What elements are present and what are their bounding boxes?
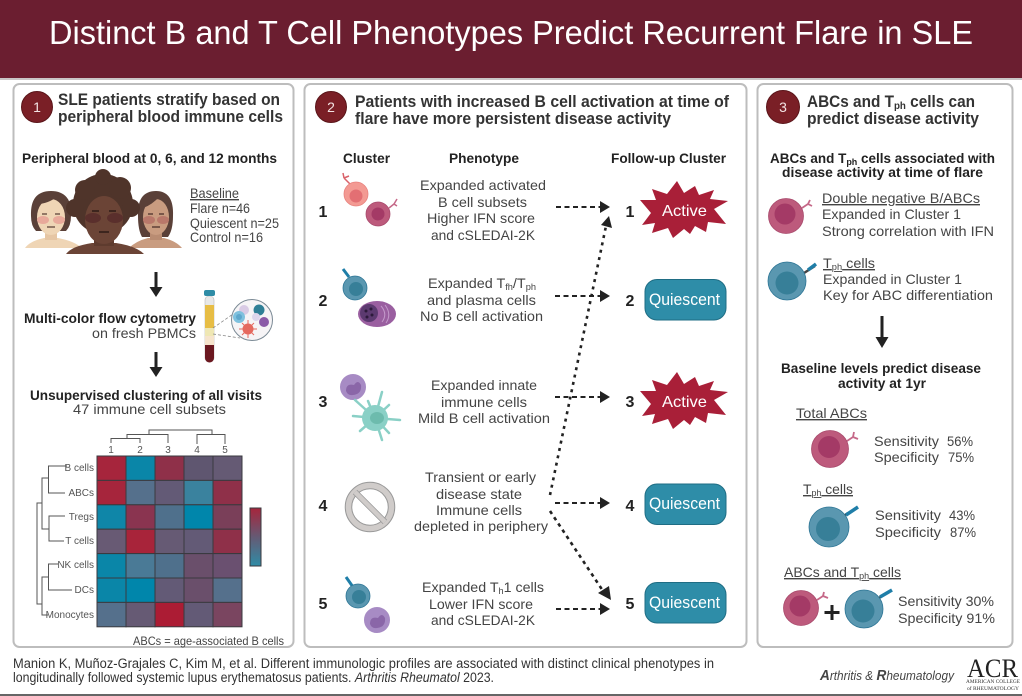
icon: ABC cell	[784, 590, 828, 626]
icon: Tph cell	[768, 262, 816, 300]
left dendrogram	[37, 466, 72, 615]
row labels: Tregs	[69, 512, 94, 523]
column labels	[108, 445, 228, 456]
panel 3 heading: predict disease activity	[807, 110, 980, 128]
heatmap colour scale	[250, 508, 261, 566]
ABC abbreviation footnote: ABCs = age-associated B cells	[133, 634, 284, 648]
row labels: ABCs	[68, 488, 94, 499]
phenotype text: cluster 3: Expanded innate	[431, 377, 537, 393]
Tph cell text: Key for ABC differentiation	[823, 287, 993, 303]
icon: cluster 4 prohibited sign	[348, 486, 392, 528]
cluster numbers: 2	[319, 293, 328, 310]
flow cytometry text: Multi-color flow cytometry	[24, 311, 196, 326]
panel 3 heading: cells can	[906, 93, 975, 111]
citation: longitudinally followed systemic lupus erythematosus patients. Arthritis Rheumatol 2023.	[13, 670, 494, 685]
column headers: Follow-up Cluster	[611, 151, 727, 166]
Tph metrics	[875, 507, 976, 540]
panel 1 heading: peripheral blood immune cells	[58, 108, 283, 126]
column labels: 1	[108, 445, 114, 456]
Tph metrics: Sensitivity	[875, 507, 941, 523]
follow-up numbers: 5	[626, 596, 635, 613]
total ABCs metrics: Specificity	[874, 449, 939, 465]
panel 3 heading: ABCs and T	[807, 93, 901, 111]
cluster numbers: 3	[319, 394, 328, 411]
cluster numbers: 1	[319, 204, 328, 221]
total ABCs label: Total ABCs	[796, 405, 867, 421]
row labels: T cells	[65, 536, 94, 547]
combined metrics: Specificity 91%	[898, 610, 995, 626]
phenotype text: cluster 2: fh	[505, 282, 513, 292]
phenotype text: cluster 3: Mild B cell activation	[418, 410, 550, 426]
top dendrogram	[111, 430, 225, 444]
flow cytometry text: on fresh PBMCs	[92, 325, 196, 341]
Tph label: ph	[811, 488, 821, 498]
step badge 3: 3	[779, 99, 787, 115]
panel 2 heading: flare have more persistent disease activity	[355, 110, 672, 128]
status badge: follow-up 3 active	[640, 372, 728, 429]
cluster numbers: 4	[319, 498, 328, 515]
step badge 2	[316, 92, 346, 122]
dotted arrow: cluster 4 to follow-up 1	[550, 216, 612, 495]
phenotype text: cluster 2: and plasma cells	[427, 292, 536, 308]
icon: cluster 2 T cell and plasma cell	[343, 269, 396, 327]
plus sign	[824, 605, 840, 620]
citation: Manion K, Muñoz-Grajales C, Kim M, et al. Different immunologic profiles are associated with distinct clinical phenotypes in	[13, 656, 714, 671]
status badge: follow-up 1 active	[640, 181, 728, 238]
combined metrics: Sensitivity 30%	[898, 593, 994, 609]
Tph metrics: 87%	[950, 524, 976, 540]
baseline cohort counts: Quiescent n=25	[190, 215, 279, 231]
row labels	[46, 463, 94, 621]
arrow down to clustering	[150, 352, 162, 377]
combined metrics	[898, 593, 995, 626]
phenotype text: cluster 5: Expanded T	[422, 579, 497, 595]
panel 3 heading: ph	[894, 100, 906, 112]
step badge 3	[766, 90, 800, 124]
phenotype text: cluster 5: h	[499, 586, 504, 596]
phenotype text: cluster 4: disease state	[436, 486, 522, 502]
panel 1 heading	[58, 91, 283, 126]
baseline prediction subheading: activity at 1yr	[838, 376, 927, 391]
phenotype text: cluster 4: depleted in periphery	[414, 518, 548, 534]
journal name: Arthritis & Rheumatology	[819, 667, 955, 684]
status badge: follow-up 4 quiescent: Quiescent	[649, 495, 720, 513]
phenotype text: cluster 4: Immune cells	[436, 502, 522, 518]
step badge 1: 1	[33, 99, 41, 115]
phenotype text: cluster 4: Transient or early	[425, 469, 536, 485]
status badge: follow-up 2 quiescent	[645, 280, 726, 320]
phenotype text: cluster 3: immune cells	[441, 394, 527, 410]
phenotype text: cluster 3	[418, 377, 550, 426]
heatmap with dendrograms	[37, 430, 242, 627]
total ABCs metrics: 56%	[947, 433, 973, 449]
Tph label: cells	[821, 481, 853, 497]
Tph metrics: 43%	[949, 507, 975, 523]
total ABCs metrics: Sensitivity	[874, 433, 939, 449]
Tph cell text	[823, 255, 993, 303]
phenotype text: cluster 5: and cSLEDAI-2K	[431, 612, 536, 628]
phenotype text: cluster 1: and cSLEDAI-2K	[431, 227, 536, 243]
baseline cohort counts: Control n=16	[190, 229, 263, 245]
baseline prediction subheading	[781, 361, 981, 391]
column labels: 5	[222, 445, 228, 456]
association subheading: cells associated with	[857, 151, 995, 166]
icon: double negative B cell	[768, 198, 812, 234]
Tph metrics: Specificity	[875, 524, 941, 540]
Tph label: T	[803, 481, 812, 497]
association subheading: ph	[846, 157, 857, 167]
phenotype text: cluster 5: 1 cells	[504, 579, 544, 595]
row labels: Monocytes	[46, 610, 94, 621]
column headers: Cluster	[343, 151, 391, 166]
phenotype text: cluster 2: Expanded T	[428, 275, 503, 291]
step badge 2: 2	[327, 99, 335, 115]
Tph cell text: Expanded in Cluster 1	[823, 271, 962, 287]
column headers: Phenotype	[449, 151, 519, 166]
phenotype text: cluster 2: /T	[513, 275, 526, 291]
clustering text: 47 immune cell subsets	[73, 401, 226, 417]
column labels: 3	[165, 445, 171, 456]
heatmap cells	[97, 456, 242, 627]
step badge 1	[22, 92, 52, 122]
phenotype text: cluster 1: B cell subsets	[438, 194, 527, 210]
phenotype text: cluster 5: Lower IFN score	[429, 596, 533, 612]
icon: Tph cell	[809, 507, 858, 547]
follow-up numbers: 3	[626, 394, 635, 411]
dotted arrow: cluster 4 to follow-up 5	[550, 511, 611, 600]
baseline prediction subheading: Baseline levels predict disease	[781, 361, 981, 376]
association subheading	[770, 151, 995, 180]
phenotype text: cluster 2	[420, 275, 543, 324]
peripheral blood subheading: Peripheral blood at 0, 6, and 12 months	[22, 151, 277, 166]
follow-up numbers: 1	[626, 204, 635, 221]
clustering text	[30, 388, 262, 417]
header banner	[0, 0, 1022, 80]
ACR logo: ACR	[967, 654, 1019, 683]
column labels: 4	[194, 445, 200, 456]
combined predictor	[784, 564, 995, 628]
phenotype text: cluster 1	[420, 177, 546, 243]
baseline cohort counts: Flare n=46	[190, 200, 250, 216]
Tph cells predictor	[803, 481, 976, 547]
panel 3: predictors of disease activity	[758, 84, 1012, 647]
follow-up numbers	[626, 204, 635, 613]
combined label: ABCs and T	[784, 564, 859, 580]
icon: cluster 5 T cell and innate cell	[346, 577, 390, 632]
baseline cohort counts	[190, 185, 279, 245]
icon: cluster 3 innate cells	[340, 374, 400, 440]
phenotype text: cluster 2: ph	[526, 282, 536, 292]
follow-up numbers: 4	[626, 498, 635, 515]
phenotype text: cluster 4	[414, 469, 548, 534]
ACR logo: of RHEUMATOLOGY	[967, 685, 1019, 692]
icon: ABC cell	[812, 430, 858, 468]
row labels: DCs	[75, 585, 94, 596]
arrow down to baseline prediction	[876, 316, 888, 348]
panel 3 heading	[807, 93, 980, 128]
icon: cluster 1 B cells	[343, 173, 397, 226]
title: Distinct B and T Cell Phenotypes Predict Recurrent Flare in SLE	[49, 14, 973, 51]
panel 2: clusters and follow-up	[304, 84, 746, 647]
double negative B cell text: Strong correlation with IFN	[822, 223, 994, 239]
panel 1 heading: SLE patients stratify based on	[58, 91, 280, 109]
follow-up numbers: 2	[626, 293, 635, 310]
row labels: B cells	[65, 463, 94, 474]
arrow down to flow cytometry	[150, 272, 162, 297]
baseline cohort counts: Baseline	[190, 185, 239, 201]
panel 1: patient stratification	[14, 84, 294, 648]
total ABCs predictor	[796, 405, 974, 468]
panel 2 heading	[355, 93, 729, 128]
combined label: cells	[869, 564, 901, 580]
Tph cell text: T	[823, 255, 832, 271]
status badge: follow-up 5 quiescent	[645, 582, 726, 623]
status badge: follow-up 3 active: Active	[662, 394, 707, 411]
dashed arrows: cluster to follow-up	[555, 201, 610, 615]
double negative B cell text: Expanded in Cluster 1	[822, 206, 961, 222]
total ABCs metrics: 75%	[948, 449, 974, 465]
clustering text: Unsupervised clustering of all visits	[30, 388, 262, 403]
Tph cell text: cells	[842, 255, 875, 271]
phenotype text: cluster 2: No B cell activation	[420, 308, 543, 324]
flow cytometry text	[24, 311, 196, 341]
total ABCs metrics	[874, 433, 974, 465]
ACR logo: AMERICAN COLLEGE	[966, 679, 1021, 685]
combined label: ph	[859, 571, 869, 581]
icon: three patient faces with malar rash	[25, 169, 182, 254]
phenotype text: cluster 1: Higher IFN score	[427, 210, 535, 226]
double negative B cell text: Double negative B/ABCs	[822, 190, 980, 206]
icon: blood tube and cell magnifier	[204, 290, 272, 362]
status badge: follow-up 5 quiescent: Quiescent	[649, 594, 720, 612]
icon: Tph cell	[845, 590, 892, 628]
Tph cell text: ph	[832, 262, 842, 272]
row labels: NK cells	[57, 560, 94, 571]
phenotype text: cluster 5	[422, 579, 544, 628]
association subheading: disease activity at time of flare	[782, 165, 983, 180]
status badge: follow-up 1 active: Active	[662, 203, 707, 220]
double negative B cell text	[822, 190, 994, 239]
cluster numbers	[319, 204, 328, 613]
citation	[13, 656, 714, 685]
column labels: 2	[137, 445, 143, 456]
panel 2 heading: Patients with increased B cell activation at time of	[355, 93, 729, 111]
status badge: follow-up 2 quiescent: Quiescent	[649, 291, 720, 309]
column headers	[343, 151, 727, 166]
phenotype text: cluster 1: Expanded activated	[420, 177, 546, 193]
association subheading: ABCs and T	[770, 151, 847, 166]
cluster numbers: 5	[319, 596, 328, 613]
status badge: follow-up 4 quiescent	[645, 484, 726, 524]
